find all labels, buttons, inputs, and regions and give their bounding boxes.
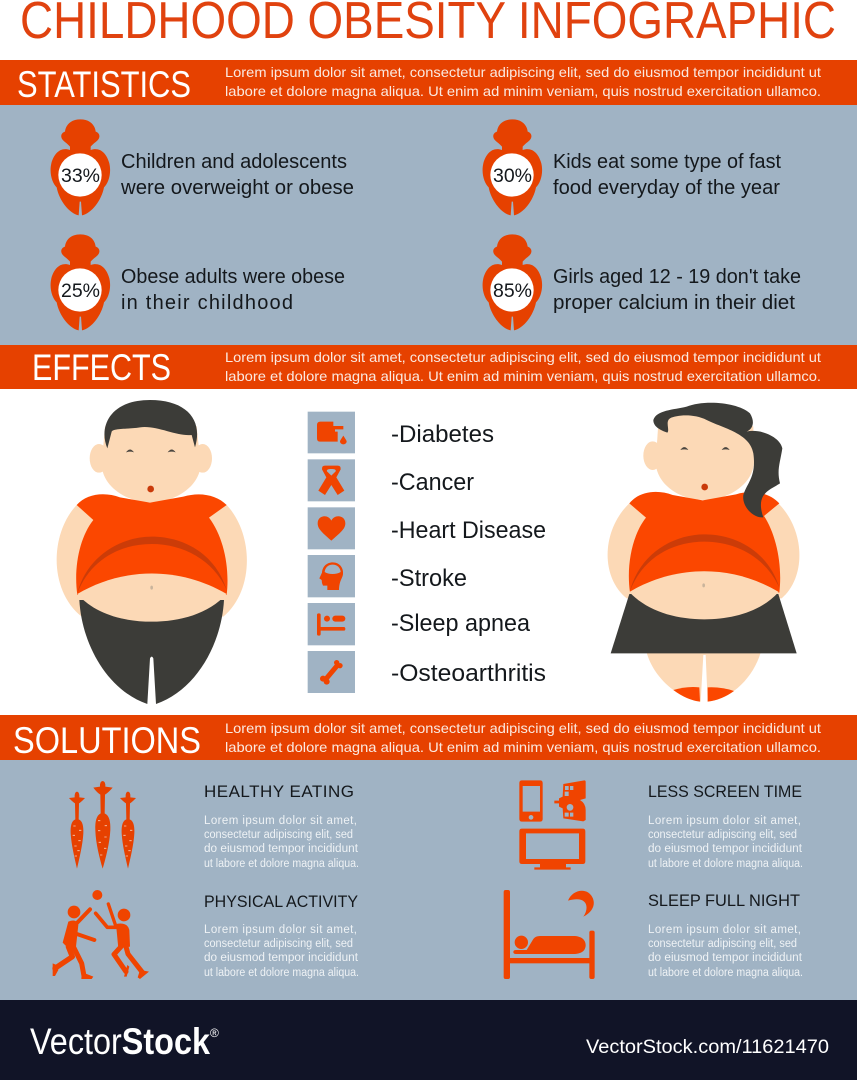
text: physical activity	[204, 892, 359, 979]
header: effects: EFFECTS	[32, 347, 171, 388]
stat: 30%: food everyday of the year	[553, 177, 780, 199]
header: solutions: labore et dolore magna aliqua. Ut enim ad minim veniam, quis nostrud exercitation ullamco.	[225, 739, 821, 755]
effects list: -Sleep apnea	[391, 610, 531, 637]
header: solutions	[0, 715, 857, 761]
footer: watermark bar	[0, 1000, 857, 1080]
header: solutions: SOLUTIONS	[13, 720, 201, 761]
header: statistics: Lorem ipsum dolor sit amet, consectetur adipiscing elit, sed do eiusmod tempor incididunt ut	[225, 64, 821, 80]
text: sleep full night: do eiusmod tempor incididunt	[648, 952, 803, 964]
text: less screen time: LESS SCREEN TIME	[648, 782, 802, 801]
effects list: -Cancer	[391, 469, 474, 496]
header: solutions: Lorem ipsum dolor sit amet, consectetur adipiscing elit, sed do eiusmod tempor incididunt ut	[225, 720, 821, 736]
stat: 33%	[51, 119, 354, 215]
stat: 25%: Obese adults were obese	[121, 266, 345, 288]
stat: 33%: were overweight or obese	[120, 177, 354, 199]
text: physical activity: do eiusmod tempor incididunt	[204, 952, 359, 964]
text: less screen time: do eiusmod tempor incididunt	[648, 843, 803, 855]
text: physical activity: PHYSICAL ACTIVITY	[204, 892, 358, 911]
icon: sleep	[504, 890, 595, 979]
icon: carrots	[69, 781, 136, 869]
stat: 33%: 33%	[61, 166, 100, 187]
icon: diabetes	[308, 412, 355, 453]
stat: 85%: proper calcium in their diet	[553, 292, 795, 314]
text: sleep full night: ut labore et dolore magna aliqua.	[648, 967, 803, 979]
header: effects: Lorem ipsum dolor sit amet, consectetur adipiscing elit, sed do eiusmod tempor incididunt ut	[225, 349, 821, 365]
header: statistics: STATISTICS	[17, 64, 191, 105]
footer: watermark bar: VectorStock.com/11621470	[586, 1037, 829, 1058]
text: sleep full night: consectetur adipiscing elit, sed	[648, 938, 797, 950]
header: effects: labore et dolore magna aliqua. Ut enim ad minim veniam, quis nostrud exercitation ullamco.	[225, 368, 821, 384]
header: effects	[0, 345, 857, 389]
text: less screen time	[648, 782, 803, 870]
icon: cancer ribbon	[308, 459, 355, 501]
illustration: girl	[608, 403, 799, 702]
panel: statistics	[0, 60, 857, 345]
icon: sleep apnea bed	[308, 603, 355, 645]
text: physical activity: ut labore et dolore magna aliqua.	[204, 967, 359, 979]
stat: 30%: Kids eat some type of fast	[553, 151, 781, 173]
panel: solutions	[0, 715, 857, 1000]
text: sleep full night: SLEEP FULL NIGHT	[648, 891, 800, 910]
text: sleep full night	[648, 891, 803, 979]
text: physical activity: Lorem ipsum dolor sit amet,	[204, 924, 357, 936]
header: statistics: labore et dolore magna aliqua. Ut enim ad minim veniam, quis nostrud exercitation ullamco.	[225, 83, 821, 99]
header: statistics	[0, 60, 857, 105]
footer: watermark bar: VectorStock	[30, 1021, 210, 1062]
icon: heart	[308, 507, 355, 549]
text: less screen time: consectetur adipiscing elit, sed	[648, 829, 797, 841]
stat: 30%	[483, 119, 781, 215]
stat: 33%: Children and adolescents	[121, 151, 347, 173]
stat: 85%: 85%	[493, 281, 532, 302]
text: healthy eating: HEALTHY EATING	[204, 782, 354, 801]
stat: 85%: Girls aged 12 - 19 don't take	[553, 266, 801, 288]
text: sleep full night: Lorem ipsum dolor sit amet,	[648, 924, 801, 936]
stat: 85%	[483, 234, 801, 330]
text: less screen time: ut labore et dolore magna aliqua.	[648, 858, 803, 870]
text: healthy eating: consectetur adipiscing elit, sed	[204, 829, 353, 841]
stat: 25%	[51, 234, 345, 330]
text: healthy eating: ut labore et dolore magna aliqua.	[204, 858, 359, 870]
icon: devices	[519, 780, 586, 870]
text: less screen time: Lorem ipsum dolor sit amet,	[648, 815, 801, 827]
illustration: boy	[57, 400, 247, 704]
text: healthy eating	[204, 782, 359, 870]
text: healthy eating: Lorem ipsum dolor sit amet,	[204, 815, 357, 827]
effects list	[391, 421, 546, 687]
stat: 30%: 30%	[493, 166, 532, 187]
stat: 25%: in their childhood	[121, 292, 293, 314]
stat: 25%: 25%	[61, 281, 100, 302]
icon: osteoarthritis bone	[308, 651, 355, 693]
text: physical activity: consectetur adipiscing elit, sed	[204, 938, 353, 950]
effects list: -Osteoarthritis	[391, 660, 546, 687]
effects list: -Heart Disease	[391, 517, 546, 544]
text: healthy eating: do eiusmod tempor incididunt	[204, 843, 359, 855]
icon: physical activity	[53, 890, 149, 979]
effects list: -Diabetes	[391, 421, 494, 448]
effects list: -Stroke	[391, 565, 467, 592]
icon: stroke head	[308, 555, 355, 597]
footer: watermark bar: ®	[210, 1026, 219, 1040]
effects icons	[308, 412, 355, 693]
